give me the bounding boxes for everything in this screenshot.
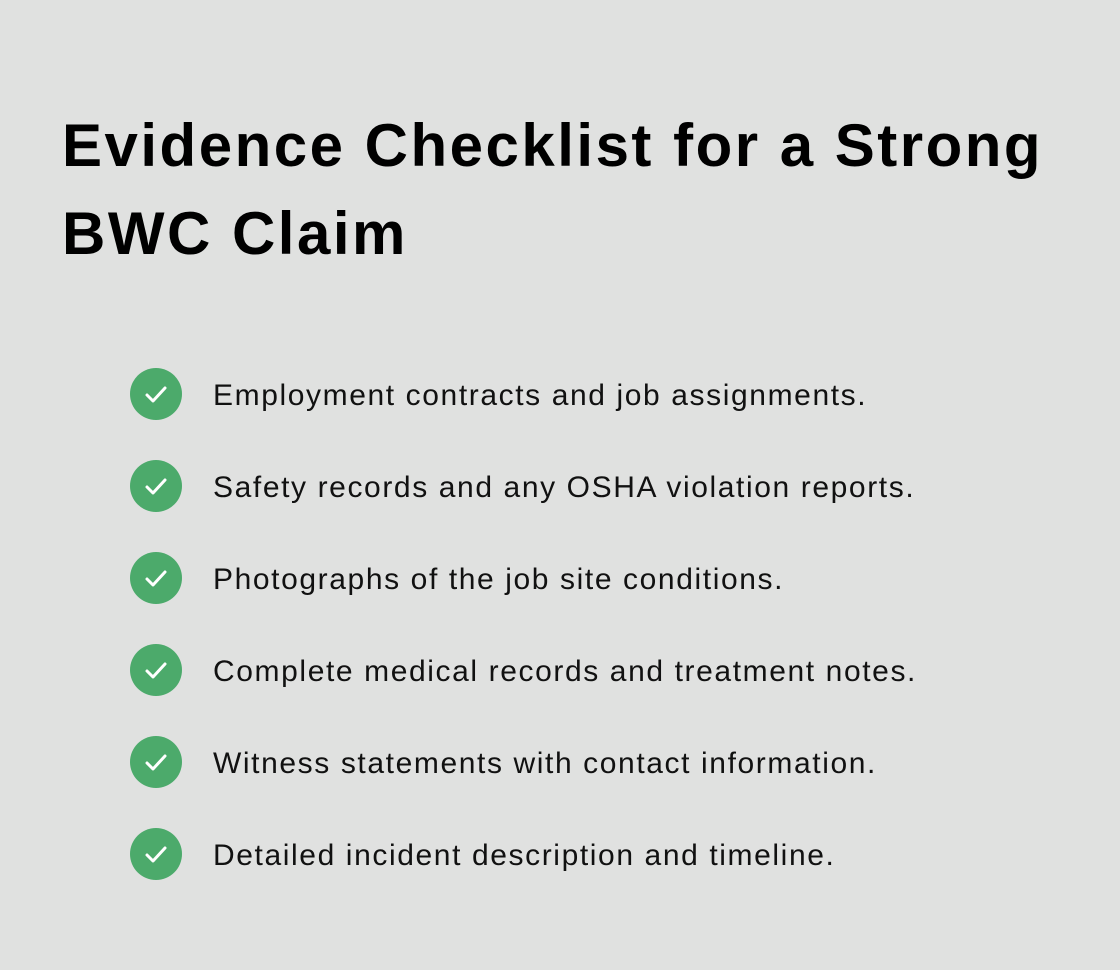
title: Evidence Checklist for a Strong BWC Claim [62,112,1043,267]
checklist item 1: Employment contracts and job assignments. [213,379,867,412]
icon: check [130,736,182,788]
icon: check [130,644,182,696]
checklist item 6: Detailed incident description and timeline. [213,839,835,872]
checklist item 5: Witness statements with contact information. [213,747,877,780]
checklist item 3: Photographs of the job site conditions. [213,563,784,596]
checklist item 4 [130,644,917,696]
icon: check [130,460,182,512]
checklist item 4: Complete medical records and treatment notes. [213,655,917,688]
checklist item 6 [130,828,835,880]
icon: check [130,552,182,604]
checklist item 5 [130,736,877,788]
icon: check [130,368,182,420]
checklist item 2: Safety records and any OSHA violation reports. [213,471,915,504]
checklist item 1 [130,368,867,420]
checklist item 3 [130,552,784,604]
checklist item 2 [130,460,915,512]
icon: check [130,828,182,880]
